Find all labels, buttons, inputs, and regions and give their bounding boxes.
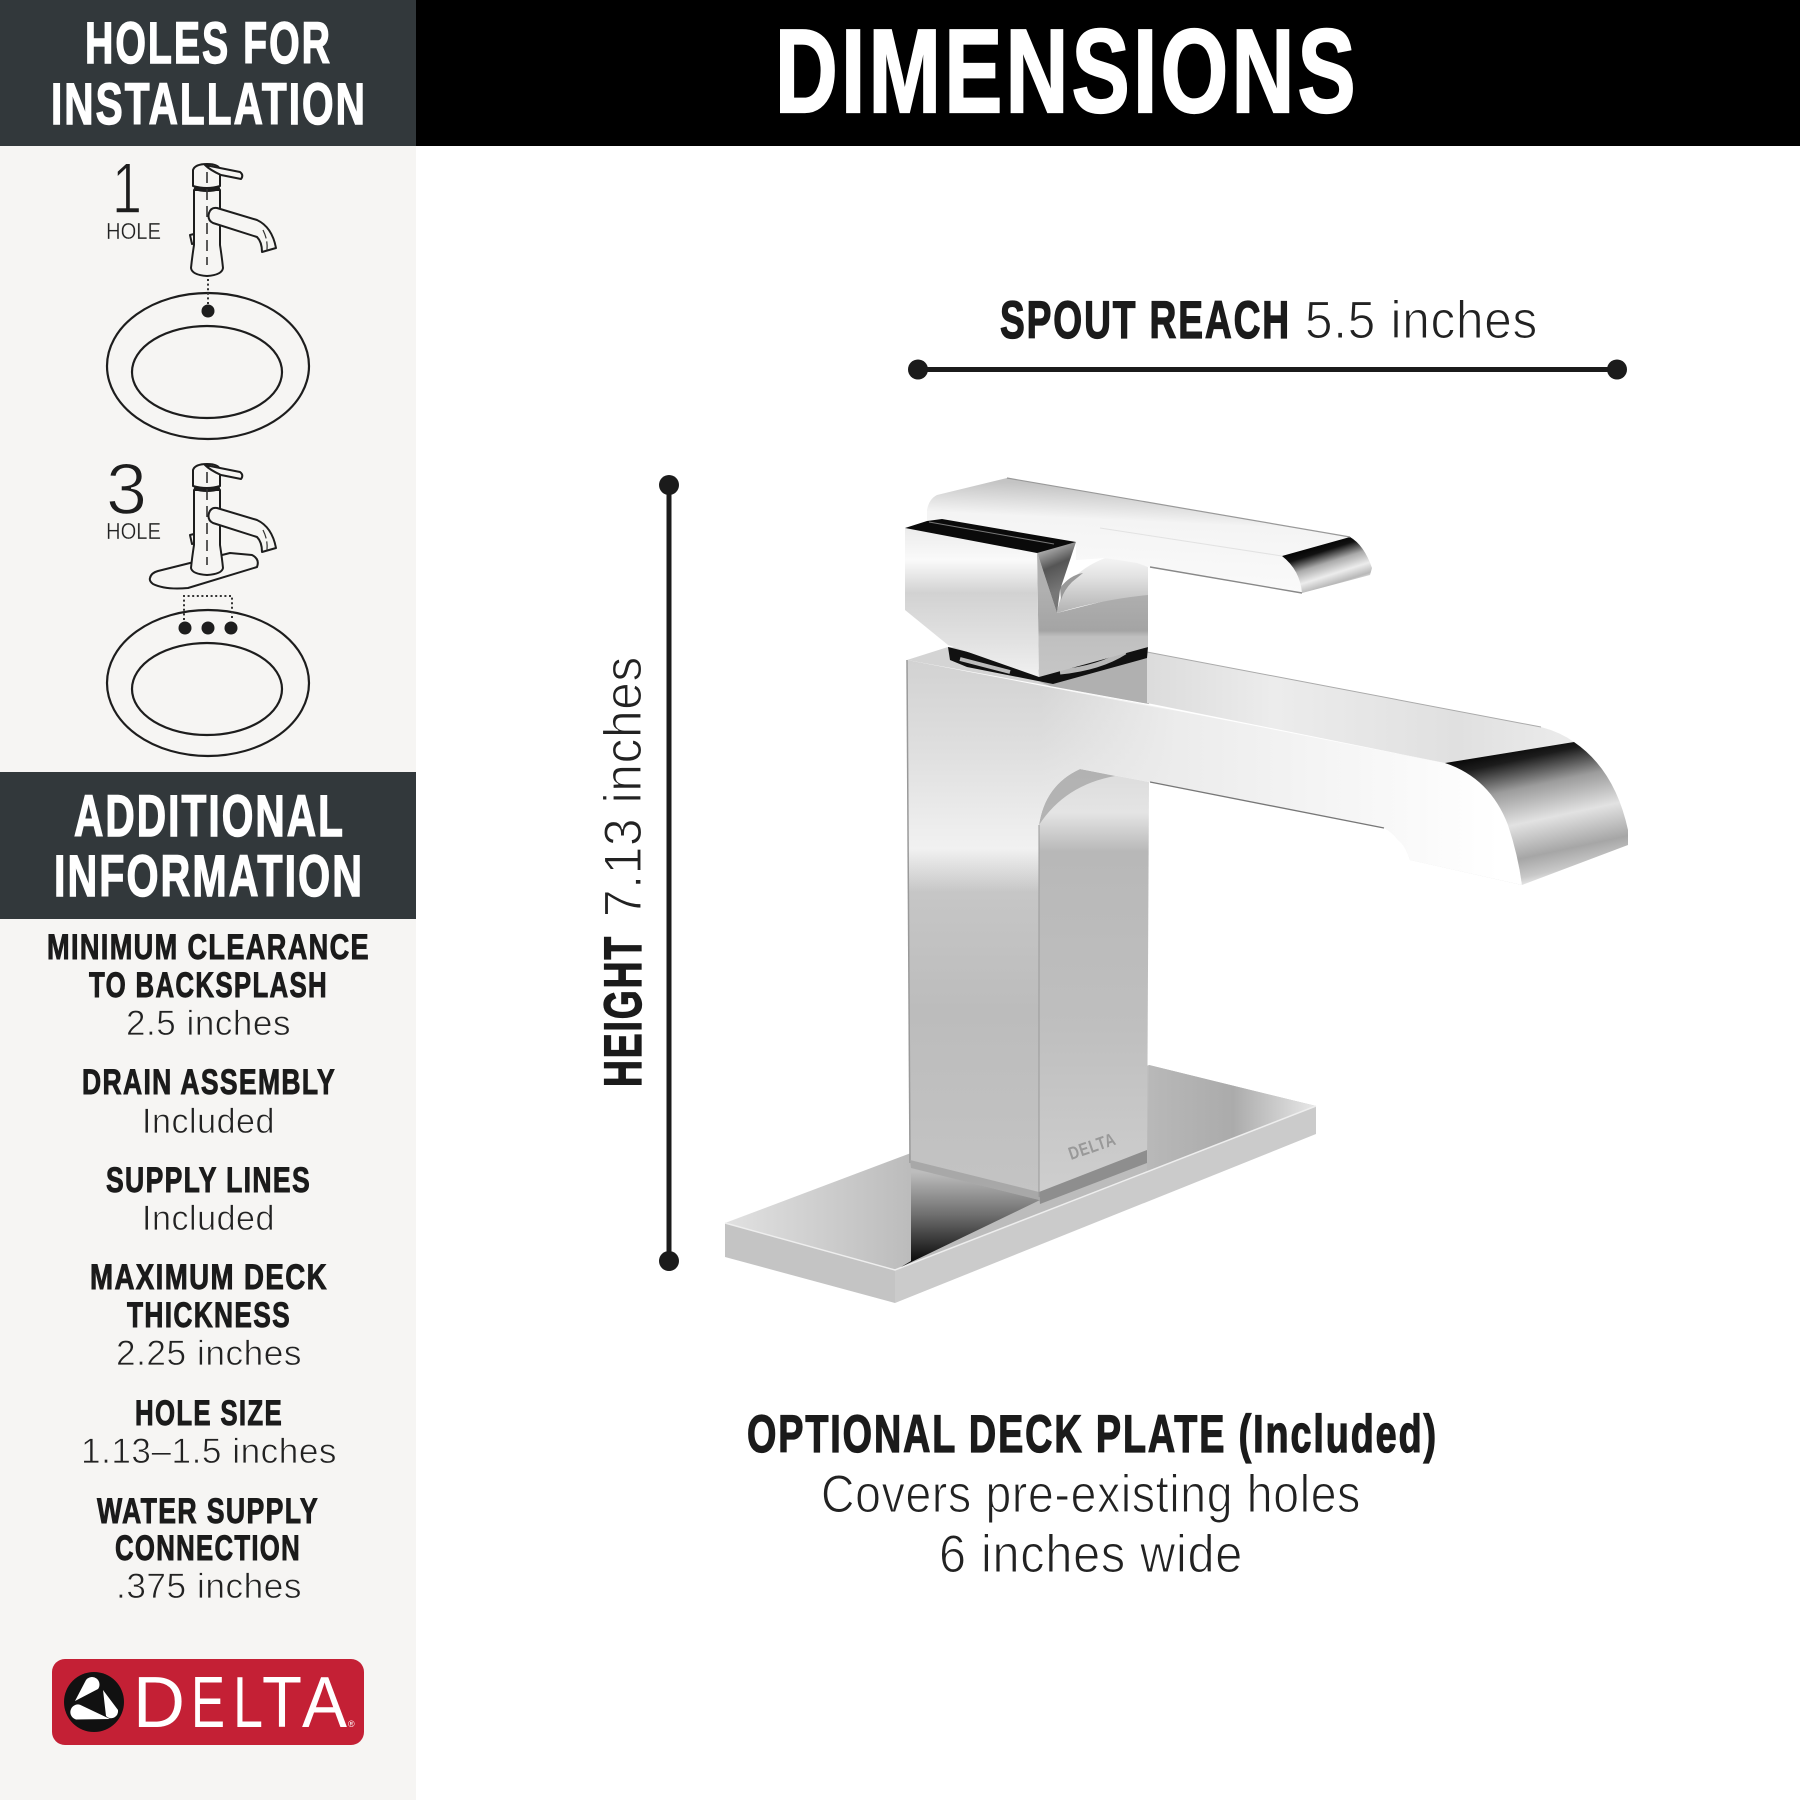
text block: hole size xyxy=(81,1394,337,1471)
deck plate xyxy=(725,1065,1316,1303)
text block: minimum clearance: MINIMUM CLEARANCE xyxy=(47,928,370,967)
text block: water supply connection: CONNECTION xyxy=(115,1529,301,1568)
text block: supply lines xyxy=(106,1161,311,1238)
text block: minimum clearance: TO BACKSPLASH xyxy=(89,966,328,1005)
text block: hole size: 1.13–1.5 inches xyxy=(81,1432,337,1471)
text block: minimum clearance xyxy=(47,928,370,1043)
text block: maximum deck thickness: MAXIMUM DECK xyxy=(90,1258,328,1297)
text block: minimum clearance: 2.5 inches xyxy=(126,1004,291,1043)
text block: drain assembly: DRAIN ASSEMBLY xyxy=(82,1063,336,1102)
heading bar: additional information: INFORMATION xyxy=(54,844,364,909)
text block: water supply connection: WATER SUPPLY xyxy=(97,1492,319,1531)
label: height xyxy=(594,656,653,1087)
caption: optional deck plate: OPTIONAL DECK PLATE (Included) xyxy=(747,1405,1438,1464)
logo: Delta: ® xyxy=(348,1719,355,1729)
dimension line: height xyxy=(659,475,679,1271)
logo: Delta: D xyxy=(133,1663,185,1743)
icon: single-hole faucet xyxy=(190,164,276,276)
caption: optional deck plate: 6 inches wide xyxy=(939,1525,1243,1584)
caption: optional deck plate: Covers pre-existing holes xyxy=(821,1465,1361,1524)
text block: supply lines: SUPPLY LINES xyxy=(106,1161,311,1200)
handle xyxy=(905,478,1372,684)
heading bar: holes for installation: INSTALLATION xyxy=(51,72,367,137)
text block: maximum deck thickness: THICKNESS xyxy=(127,1296,291,1335)
dimension line: spout reach xyxy=(908,360,1627,380)
icon: one hole label xyxy=(106,149,161,244)
logo: Delta: T xyxy=(262,1663,302,1743)
text block: maximum deck thickness xyxy=(90,1258,328,1373)
icon: three hole label xyxy=(106,450,161,544)
heading bar: holes for installation xyxy=(0,0,416,146)
logo: Delta: E xyxy=(191,1663,225,1743)
title bar: dimensions: DIMENSIONS xyxy=(775,5,1359,138)
text block: supply lines: Included xyxy=(142,1199,275,1238)
icon: three hole label: HOLE xyxy=(106,518,161,544)
text block: maximum deck thickness: 2.25 inches xyxy=(116,1334,302,1373)
base logo mark: DELTA xyxy=(1066,1129,1119,1164)
caption: optional deck plate xyxy=(747,1405,1438,1584)
logo: Delta xyxy=(52,1659,364,1745)
icon: sink with one hole xyxy=(107,279,309,439)
text block: drain assembly: Included xyxy=(142,1102,275,1141)
label: spout reach: 5.5 inches xyxy=(1305,291,1538,350)
text block: drain assembly xyxy=(82,1063,336,1141)
logo: Delta: A xyxy=(302,1663,347,1743)
panel: sidebar xyxy=(0,0,416,1800)
text block: water supply connection xyxy=(97,1492,319,1606)
text block: hole size: HOLE SIZE xyxy=(135,1394,283,1433)
icon: faucet with deck plate xyxy=(150,464,276,588)
heading bar: holes for installation: HOLES FOR xyxy=(85,11,332,76)
label: spout reach: SPOUT REACH xyxy=(1000,291,1291,350)
icon: one hole label: 1 xyxy=(112,149,142,229)
title bar: dimensions xyxy=(416,0,1800,146)
illustration: chrome faucet xyxy=(725,478,1628,1303)
label: height: 7.13 inches xyxy=(594,656,653,917)
logo: Delta: L xyxy=(233,1663,263,1743)
icon: sink with three holes xyxy=(107,596,309,756)
heading bar: additional information xyxy=(0,772,416,919)
icon: three hole label: 3 xyxy=(106,450,147,530)
heading bar: additional information: ADDITIONAL xyxy=(74,784,345,849)
label: height: HEIGHT xyxy=(594,935,653,1087)
icon: one hole label: HOLE xyxy=(106,218,161,244)
text block: water supply connection: .375 inches xyxy=(116,1567,302,1606)
faucet body and spout xyxy=(907,647,1628,1204)
